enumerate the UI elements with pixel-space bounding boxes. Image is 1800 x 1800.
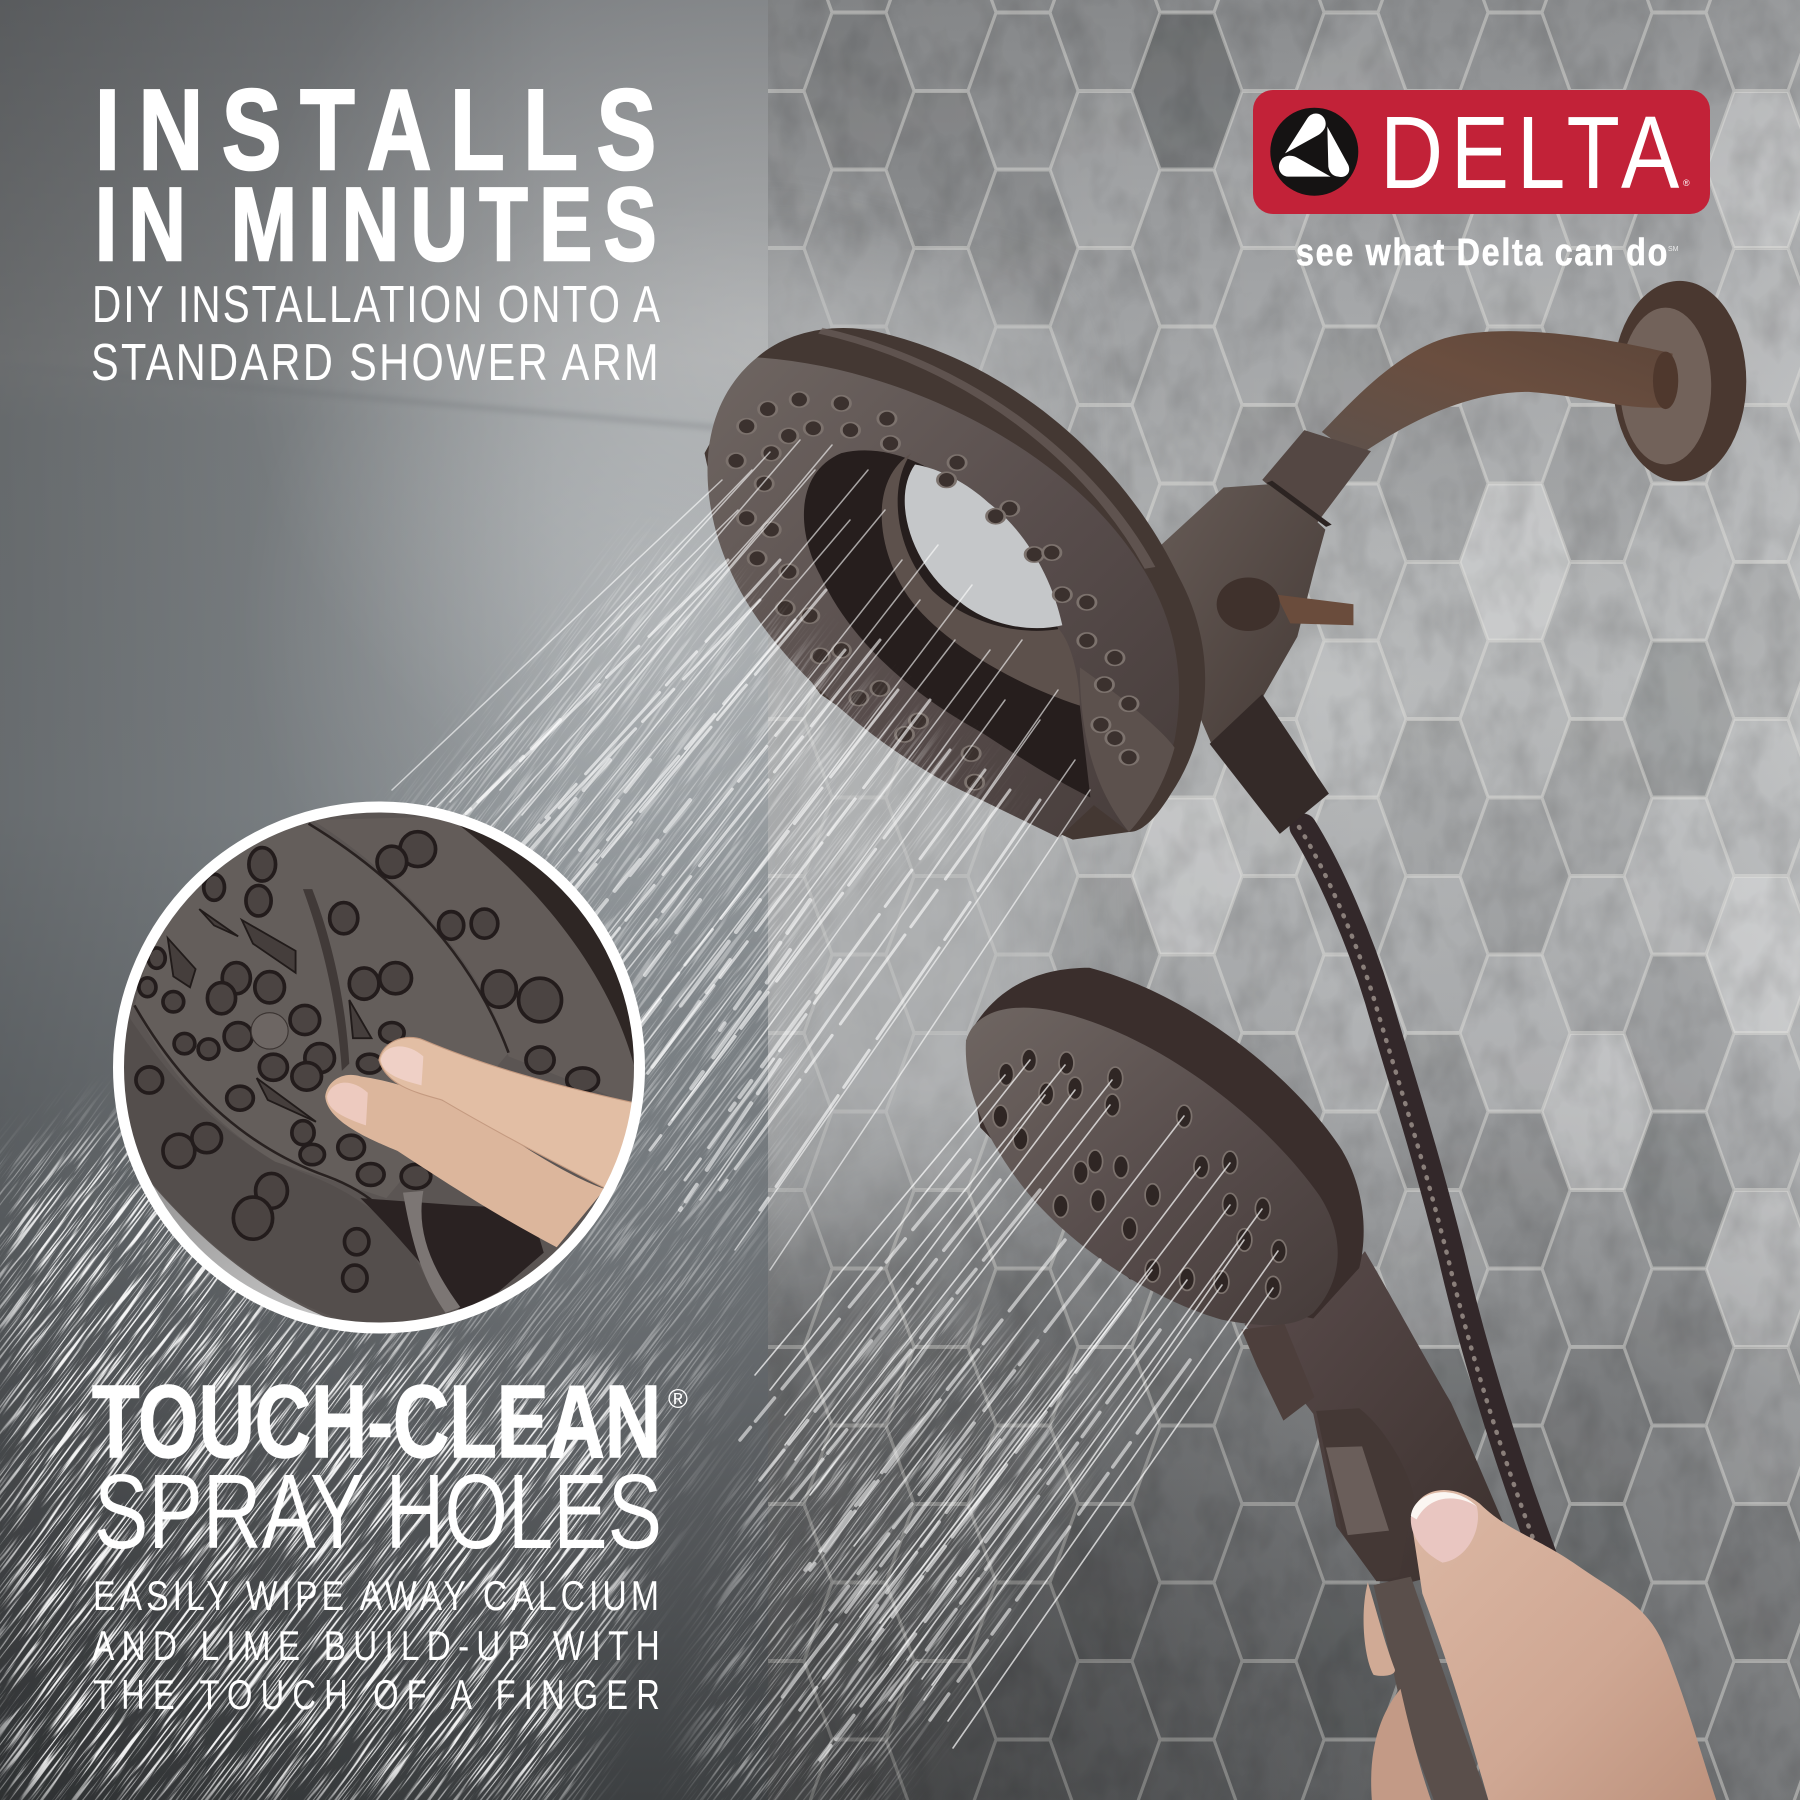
- spray holes: [993, 1049, 1286, 1299]
- tagline: SM: [1668, 246, 1679, 253]
- groove shadow: [303, 889, 349, 1071]
- rim highlight: [820, 331, 1150, 568]
- spray nozzles: [136, 832, 599, 1291]
- fingers: [325, 1037, 638, 1247]
- heading: installs in minutes: [95, 67, 675, 283]
- callout circle: touch-clean close-up: [113, 802, 645, 1334]
- dark crescent: [460, 826, 634, 1065]
- text: touch-clean description: [92, 1572, 668, 1718]
- heading: touch-clean spray holes: TOUCH-CLEAN: [92, 1364, 661, 1479]
- upper plate: [312, 816, 638, 1107]
- hand: [1364, 1490, 1716, 1800]
- text: touch-clean description: AND LIME BUILD-UP WITH: [92, 1622, 667, 1669]
- small slot marks: [168, 909, 372, 1122]
- text: touch-clean description: EASILY WIPE AWAY CALCIUM: [93, 1572, 663, 1619]
- central cavity: [804, 450, 1090, 798]
- spray holes: [727, 392, 1138, 790]
- icon: Delta triangle mark: [1270, 108, 1358, 196]
- wordmark: DELTA: [1380, 95, 1687, 210]
- centre blank disc: [251, 1013, 288, 1049]
- subheading: SPRAY HOLES: [94, 1453, 662, 1571]
- diverter body: [1157, 430, 1371, 748]
- ring shower head with diverter: [705, 328, 1371, 840]
- plate seams: [134, 824, 509, 1238]
- text: DIY installation description: [91, 276, 662, 392]
- registered mark: ®: [668, 1384, 688, 1414]
- handle upper: [1244, 1251, 1517, 1582]
- lower plate: [112, 1005, 447, 1325]
- left wall background: [0, 0, 768, 1800]
- handle lower: [1374, 1577, 1488, 1800]
- text: DIY installation description: STANDARD SHOWER ARM: [91, 334, 661, 392]
- silver background wedge: [152, 1185, 326, 1317]
- inner wall of ring: [882, 453, 1080, 706]
- right tiled wall: [740, 0, 1800, 1800]
- headline line one: INSTALLS: [95, 67, 675, 194]
- head outer rim: [705, 328, 1205, 840]
- water spray: ring head: [0, 440, 1090, 1800]
- slider button: [1326, 1446, 1389, 1535]
- dark cavity and lever: [360, 1191, 544, 1313]
- logo: Delta badge: [1253, 90, 1710, 214]
- head rim: [966, 968, 1364, 1318]
- button housing: [1316, 1408, 1414, 1581]
- centre disc: [134, 824, 509, 1198]
- heading: touch-clean spray holes: [92, 1364, 688, 1571]
- clip tab: [1242, 1324, 1314, 1421]
- headline line two: IN MINUTES: [95, 167, 668, 283]
- hose: [1299, 827, 1545, 1560]
- text: DIY installation description: DIY INSTALLATION ONTO A: [92, 276, 662, 334]
- tagline: see what Delta can do: [1296, 232, 1669, 274]
- shower arm and wall flange: [1322, 281, 1746, 481]
- handheld shower: [966, 968, 1716, 1800]
- diverter knob: [1217, 577, 1353, 631]
- hexagon tile tones: [804, 13, 1800, 1739]
- registered mark: ®: [1683, 178, 1690, 188]
- lower tongue: [1080, 667, 1175, 832]
- opening through the ring: [905, 465, 1062, 628]
- text: touch-clean description: THE TOUCH OF A FINGER: [93, 1671, 668, 1718]
- hose holder: [1210, 694, 1329, 834]
- head face: [966, 1008, 1338, 1325]
- head face: [708, 357, 1179, 838]
- water spray: handheld: [640, 1060, 1278, 1800]
